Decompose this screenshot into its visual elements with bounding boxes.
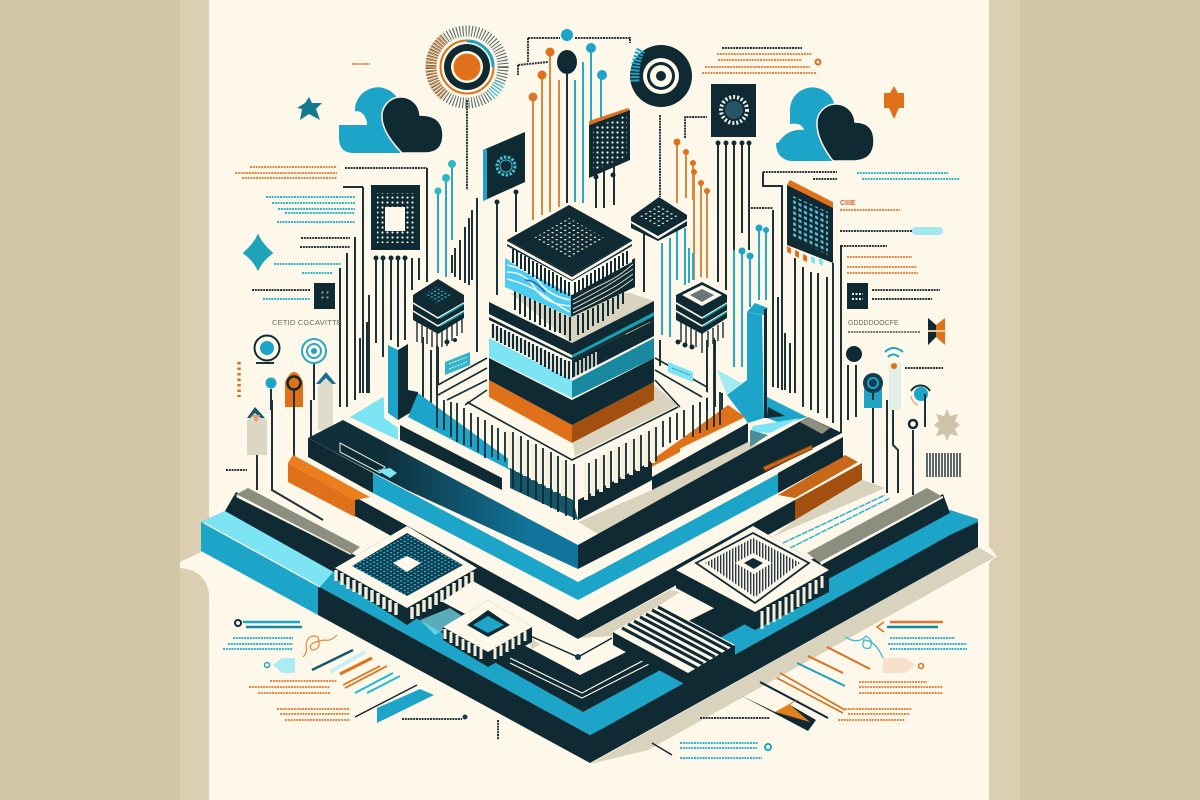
text lines: right: GDDDDOOCFE: [848, 320, 899, 327]
icon: orange star: [884, 86, 904, 119]
small square right: [847, 283, 868, 309]
chip panel: tilted right: [787, 180, 833, 266]
base tier 5: [308, 417, 842, 569]
central platform: [400, 320, 748, 520]
icon: teal badge: [245, 237, 271, 268]
side icons: right: [846, 318, 960, 477]
base tier 4: [308, 437, 843, 600]
chip panel: square gear: [711, 84, 756, 137]
pillar: left: [350, 344, 418, 440]
pin heads: [374, 29, 769, 260]
left cloud: [339, 87, 443, 153]
top strip: [201, 510, 978, 735]
chip panel: tilted gear: [483, 132, 525, 201]
text lines: left: CETID CGCAVITTE: [272, 318, 342, 327]
floors: [408, 393, 510, 470]
top surface: [489, 250, 654, 343]
upper pins: [510, 248, 572, 295]
right face: dark: [590, 519, 978, 763]
side icons: left: [239, 336, 336, 455]
chip: bottom centre: [420, 600, 532, 667]
left face: dark: [318, 586, 590, 763]
left face: cyan: [201, 522, 318, 615]
pin base: [510, 468, 578, 520]
chip panel: tilted grid: [589, 108, 630, 178]
right cloud: [776, 87, 874, 161]
text lines: right: [702, 48, 960, 368]
chip panel: square left: [371, 185, 420, 250]
tan ledges: [528, 442, 890, 649]
small square left: [314, 283, 335, 309]
bottom right notes: [652, 622, 967, 758]
lower pins: [515, 290, 623, 341]
base tier 2: [225, 488, 950, 712]
icon: teal star: [297, 97, 322, 120]
chip: bottom left: [335, 526, 477, 625]
orange tier: [489, 380, 572, 443]
heat sink: [613, 605, 735, 686]
pins: dark: [437, 338, 720, 520]
bottom left notes: [223, 620, 498, 740]
stack chip: left: [413, 279, 470, 375]
text lines: left: [226, 64, 427, 470]
text lines: right: CIIIE: [840, 200, 856, 207]
base tier 1: [201, 510, 978, 763]
top disc icon: [630, 45, 692, 107]
pinned tier: [489, 320, 572, 380]
top surface: [445, 320, 712, 470]
connector lines and pins: [257, 38, 913, 520]
blue block: [505, 258, 571, 317]
dark top: [489, 302, 572, 360]
cyan tier: [489, 338, 572, 398]
pins: cream: [510, 427, 653, 500]
chip: floating diamond: [631, 197, 687, 241]
chip: bottom right: [676, 526, 829, 630]
stack: central tower: [489, 205, 654, 443]
dark tier: [489, 358, 572, 425]
base tier 3: [288, 455, 862, 639]
top chip: [507, 205, 632, 275]
base shadow: [590, 547, 995, 764]
wiring around chips: [528, 635, 612, 660]
stack chip: right: [668, 282, 727, 382]
pillar: right: [717, 303, 807, 447]
top sunburst icon: [431, 31, 503, 103]
